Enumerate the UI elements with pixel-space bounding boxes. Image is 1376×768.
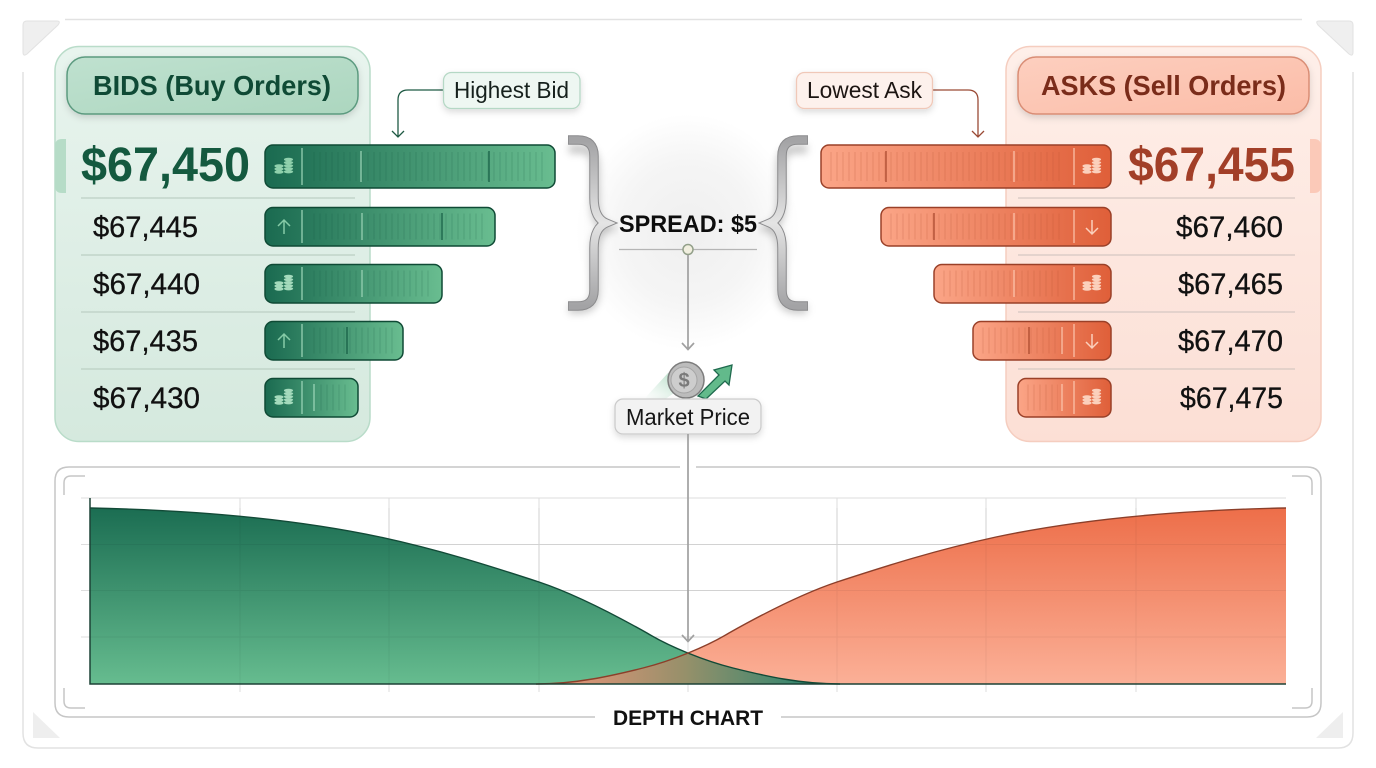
asks heading: ASKS (Sell Orders)	[1041, 70, 1286, 101]
bids heading	[67, 57, 358, 114]
icon: down arrow	[1086, 220, 1098, 234]
callout: lowest ask: Lowest Ask	[807, 77, 922, 103]
asks row dividers	[1018, 198, 1295, 369]
bid price 67,440: $67,440	[93, 268, 200, 301]
callout: highest bid: Highest Bid	[454, 77, 569, 103]
corner triangle bottom right	[1316, 712, 1343, 738]
icon: coins	[274, 158, 293, 174]
panel: asks	[1006, 46, 1321, 442]
bid bar 3	[265, 264, 442, 303]
spread label: SPREAD: $5	[619, 211, 757, 238]
icon: coins	[274, 275, 293, 291]
asks side tab	[1310, 139, 1321, 193]
callout: market price: Market Price	[626, 404, 750, 430]
depth chart title: DEPTH CHART	[613, 706, 763, 730]
ask price 67,465: $67,465	[1178, 268, 1283, 301]
bids depth area	[90, 508, 840, 684]
asks heading	[1018, 57, 1309, 114]
arrow: spread to market price	[682, 255, 694, 350]
callout: lowest ask	[796, 72, 984, 137]
ask price 67,460: $67,460	[1176, 211, 1283, 244]
bid price 67,445: $67,445	[93, 211, 198, 244]
bid bar 4	[265, 322, 403, 360]
bids side tab	[55, 139, 66, 193]
bids row dividers	[81, 198, 355, 369]
corner triangle top left	[23, 21, 59, 55]
spread divider and node	[619, 244, 757, 254]
icon: coins	[1082, 158, 1101, 174]
icon: up arrow	[278, 220, 290, 234]
callout: highest bid	[392, 72, 580, 137]
depth chart panel	[55, 467, 1321, 717]
bid bar 5	[265, 378, 358, 417]
icon: coins	[1082, 275, 1101, 291]
bids heading: BIDS (Buy Orders)	[93, 70, 331, 101]
ask bar 5	[1018, 378, 1111, 417]
ask bar 1	[821, 145, 1111, 188]
asks depth curve	[536, 508, 1286, 684]
chart axes	[90, 498, 1286, 684]
ask price 67,470: $67,470	[1178, 325, 1283, 358]
ask price 67,455: $67,455	[1128, 139, 1295, 192]
bid price 67,435: $67,435	[93, 325, 198, 358]
ask bar 4	[973, 322, 1111, 360]
bid bar 2	[265, 208, 495, 246]
bid price 67,450: $67,450	[81, 139, 250, 192]
corner triangle top right	[1317, 21, 1353, 55]
icon: market price coin: $	[678, 370, 690, 392]
icon: up arrow	[278, 334, 290, 348]
icon: market price coin	[645, 362, 732, 400]
asks depth area	[536, 508, 1286, 684]
bid bar 1	[265, 145, 555, 188]
corner triangle bottom left	[33, 712, 60, 738]
icon: coins	[274, 389, 293, 405]
panel: bids	[55, 46, 370, 442]
icon: coins	[1082, 389, 1101, 405]
right brace	[769, 140, 808, 309]
arrow: market price to crossover	[682, 434, 694, 642]
overlap area	[536, 653, 840, 684]
bids depth curve	[90, 508, 840, 684]
bid price 67,430: $67,430	[93, 382, 200, 415]
ask price 67,475: $67,475	[1180, 382, 1283, 415]
icon: down arrow	[1086, 334, 1098, 348]
ask bar 2	[881, 208, 1111, 246]
ask bar 3	[934, 264, 1111, 303]
callout: market price	[615, 399, 761, 434]
left brace	[568, 140, 607, 309]
